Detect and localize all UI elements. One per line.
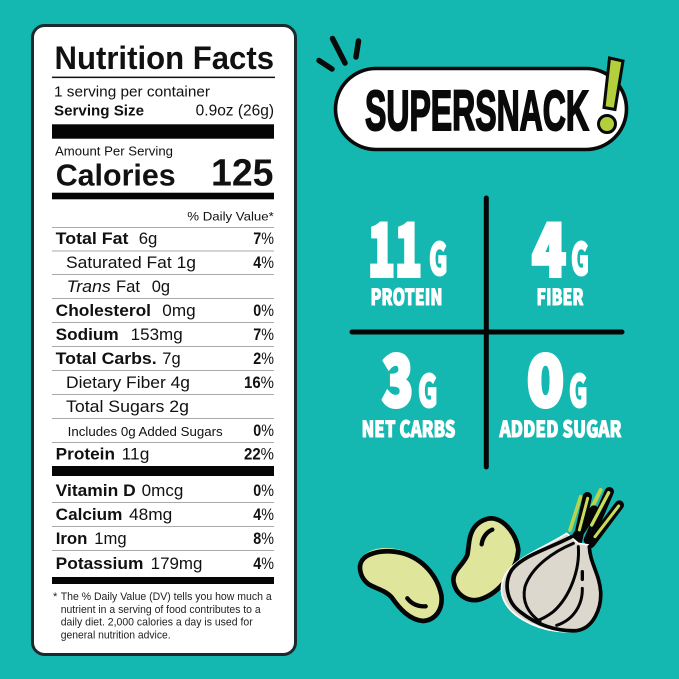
row: sodium: Sodium [56,325,119,344]
footnote: daily diet. 2,000 calories a day is used for [61,617,253,629]
row: total carbs: 7g [162,349,181,368]
row: calcium: 4% [253,506,274,524]
stat: 3g net carbs [362,326,456,444]
row: trans fat: Trans [67,277,111,296]
row: vitamin d: 0% [253,482,274,500]
text: serving size [54,102,274,120]
row: potassium: 4% [253,555,274,573]
icon: garlic bulb [501,533,601,632]
row: trans fat [67,277,170,296]
footnote: general nutrition advice. [61,629,171,641]
heading: Nutrition Facts: Nutrition Facts [54,40,274,76]
stat: 0g added sugar: G [569,356,588,420]
footnote: The % Daily Value (DV) tells you how much a [61,591,272,603]
row: iron: Iron [56,529,87,548]
row: protein: 22% [244,446,274,464]
row: saturated fat [66,253,274,272]
row: vitamin d [56,481,274,500]
row: saturated fat: 4% [253,254,274,272]
footnote: nutrient in a serving of food contributes to a [61,604,261,616]
row: iron: 1mg [94,529,127,548]
icon: burst rays [319,38,358,69]
row: cholesterol: Cholesterol [56,301,151,320]
row: vitamin d: Vitamin D [56,481,136,500]
stat: 0g added sugar [499,326,622,444]
stat: 3g net carbs: 3 [382,326,413,427]
row: total sugars: Total Sugars 2g [66,397,189,416]
stat: 0g added sugar: ADDED SUGAR [499,412,622,444]
row: cholesterol: 0% [253,302,274,320]
row: total fat: 6g [139,229,157,248]
row: sodium: 7% [253,326,274,344]
stat: 4g fiber [532,192,589,312]
row: sodium: 153mg [131,325,183,344]
row: total carbs: 2% [253,350,274,368]
row: protein: Protein [56,444,115,464]
row: dietary fiber [66,373,274,392]
row: added sugars: 0% [253,422,274,440]
text: amount per serving: Amount Per Serving [55,144,173,158]
icon: middle bean [453,518,519,600]
row: added sugars [68,422,274,440]
row: total carbs: Total Carbs. [56,349,157,368]
row: calcium [56,505,274,524]
row: cholesterol [56,301,274,320]
panel: nutrition facts label [32,26,296,654]
stat: 4g fiber: G [571,224,589,288]
text: serving size: 0.9oz (26g) [196,102,274,120]
text: percent daily value header: % Daily Value* [187,210,274,224]
footnote: * [53,591,58,603]
row: calcium: 48mg [129,505,172,524]
stat: 4g fiber: 4 [532,192,566,297]
row: trans fat: Fat [116,277,140,296]
row: added sugars: Includes 0g Added Sugars [68,424,223,439]
divider: quadrant cross [352,198,622,467]
row: potassium: Potassium [56,554,143,573]
calories row [56,153,274,195]
row: calcium: Calcium [56,505,122,524]
badge: supersnack [319,38,626,150]
illustration: beans and garlic [360,490,619,632]
icon: garlic sprouts [570,490,619,543]
row: trans fat: 0g [152,277,170,296]
row: saturated fat: Saturated Fat 1g [66,253,196,272]
stat: 0g added sugar: 0 [527,326,564,427]
calories row: 125 [211,153,274,195]
row: protein: 11g [122,444,149,464]
row: sodium [56,325,274,344]
row: total fat [56,229,274,248]
stat: 11g protein: G [429,224,448,288]
text: servings per container: 1 serving per container [54,84,210,100]
row: protein [56,444,274,464]
text: serving size: Serving Size [54,102,144,120]
row: vitamin d: 0mcg [142,481,183,500]
calories row: Calories [56,158,176,193]
stat: 11g protein: 11 [368,192,422,297]
row: total carbs [56,349,274,368]
row: dietary fiber: 16% [244,374,274,392]
row: cholesterol: 0mg [162,301,196,320]
stat: 3g net carbs: NET CARBS [362,412,456,444]
row: iron: 8% [253,530,274,548]
icon: left bean [360,548,443,622]
row: dietary fiber: Dietary Fiber 4g [66,373,190,392]
icon: exclamation mark [598,58,623,132]
row: total fat: Total Fat [56,229,129,248]
stat: 4g fiber: FIBER [536,280,584,312]
stat: 11g protein: PROTEIN [370,280,442,312]
row: potassium: 179mg [151,554,202,573]
footnote [53,591,272,641]
row: total fat: 7% [253,230,274,248]
row: potassium [56,554,274,573]
row: iron [56,529,274,548]
stat: 3g net carbs: G [418,356,438,420]
